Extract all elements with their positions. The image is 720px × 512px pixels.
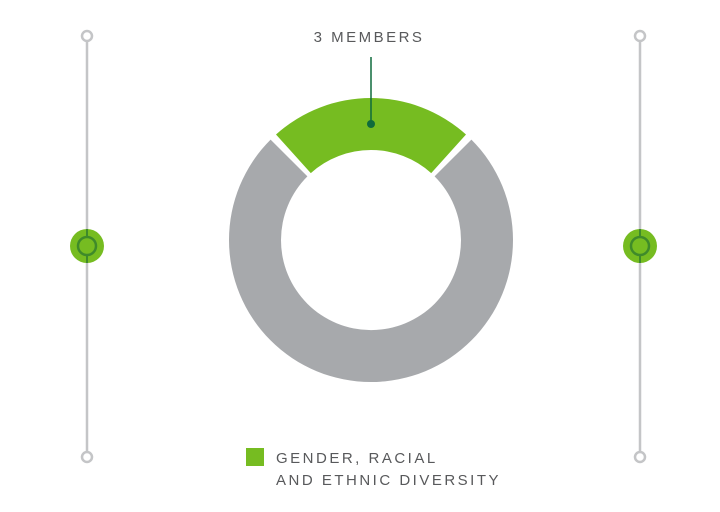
legend: AND ETHNIC DIVERSITY	[276, 472, 501, 489]
callout: 3 members	[314, 29, 424, 128]
slider: left	[70, 31, 104, 462]
slider: right	[623, 31, 657, 462]
legend	[246, 448, 501, 489]
legend: GENDER, RACIAL	[276, 450, 438, 467]
callout: 3 members: 3 MEMBERS	[314, 29, 424, 46]
donut chart	[229, 98, 513, 382]
